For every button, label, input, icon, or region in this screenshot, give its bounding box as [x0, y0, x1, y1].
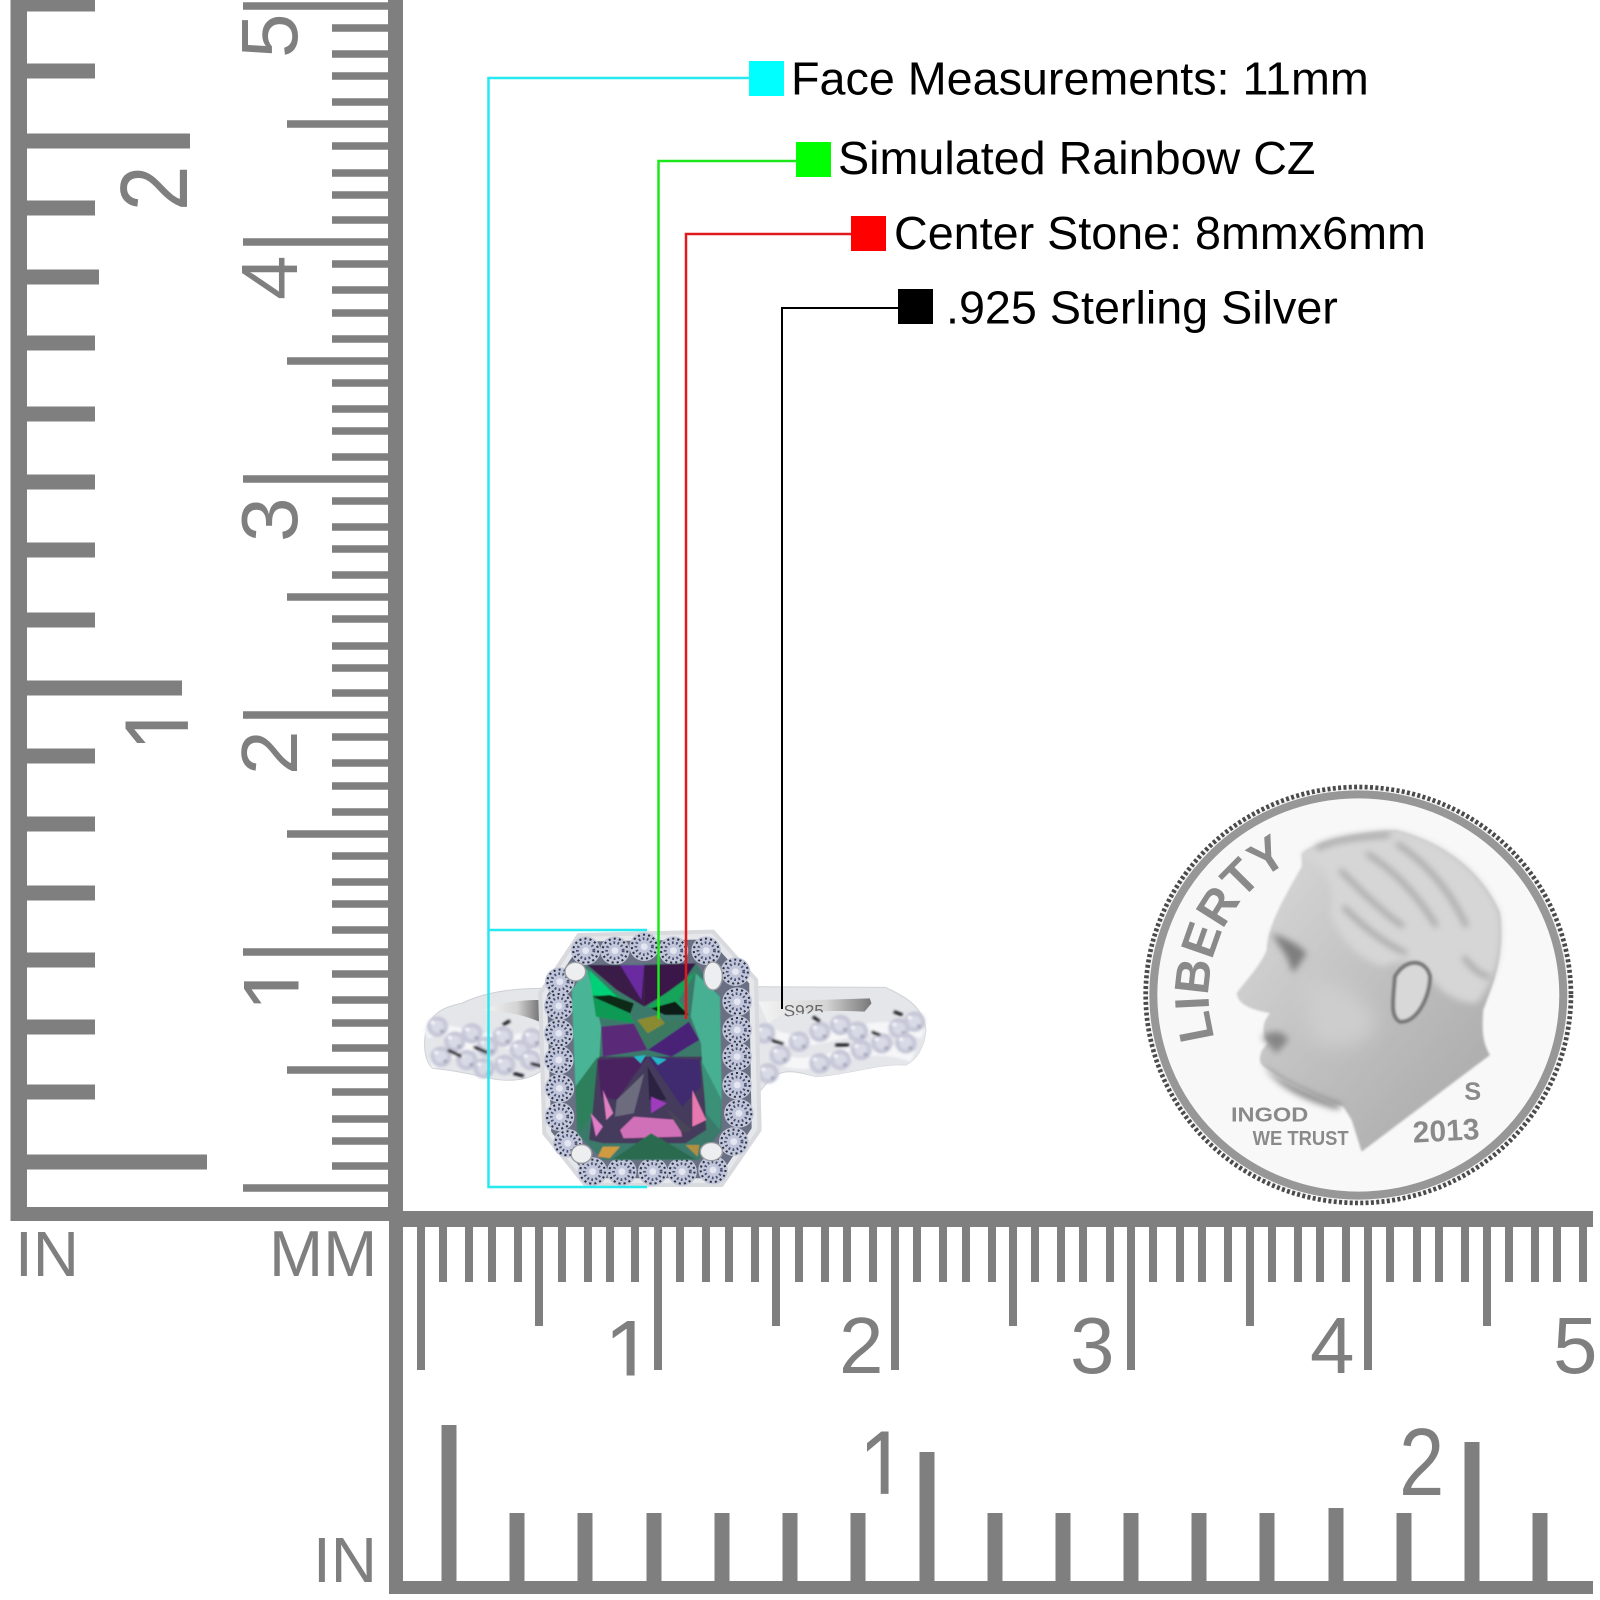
- millimetre numbers: bottom ruler: 3: [1070, 1301, 1114, 1390]
- coin rim: [1153, 794, 1563, 1196]
- legend text: stone type: Simulated Rainbow CZ: [838, 132, 1315, 184]
- coin inscription: IN GOD: INGOD: [1231, 1104, 1308, 1127]
- halo stones: [544, 932, 754, 1186]
- portrait: hair: [1302, 831, 1501, 1003]
- inch numbers: left ruler: [120, 170, 188, 743]
- millimetre numbers: bottom ruler: 1: [604, 1303, 654, 1403]
- portrait: head and neck: [1237, 830, 1501, 1152]
- pavé stones: left band: [425, 1016, 543, 1079]
- millimetre numbers: left ruler: [241, 16, 298, 1004]
- portrait: brow and eye shadow: [1272, 933, 1307, 973]
- unit label: MM: MM: [269, 1217, 377, 1290]
- millimetre numbers: bottom ruler: 4: [1310, 1301, 1354, 1390]
- ring band: left shank: [425, 988, 543, 1080]
- legend text: metal: .925 Sterling Silver: [946, 282, 1338, 334]
- left vertical ruler: [10, 0, 403, 1221]
- ring band: right shank: [756, 987, 926, 1090]
- pavé stones: right band: [754, 1011, 925, 1084]
- portrait: hair strands: [1317, 835, 1490, 977]
- bottom horizontal ruler: [389, 1211, 1598, 1594]
- portrait: cheek highlight: [1303, 982, 1377, 1047]
- prong settings: [565, 962, 722, 1163]
- unit label: IN bottom: IN: [313, 1524, 377, 1596]
- ring band: right cover over stamp: [768, 1011, 926, 1077]
- unit label: IN top: IN: [15, 1218, 79, 1290]
- halo setting outline: [540, 932, 760, 1185]
- coin reeded edge: [1146, 787, 1571, 1203]
- legend swatch: green: [796, 142, 831, 177]
- legend text: face measurements: Face Measurements: 11mm: [791, 52, 1369, 104]
- legend swatch: black: [898, 289, 933, 324]
- ruler frame: bottom ruler: [389, 1211, 1593, 1594]
- callout line: red: [686, 234, 851, 1019]
- millimetre numbers: bottom ruler: [612, 1317, 1594, 1376]
- legend swatch: red: [851, 216, 886, 251]
- ring band: left inner shadow: [484, 1000, 539, 1022]
- coin inscription: LIBERTY: LIBERTY: [1174, 834, 1279, 1042]
- portrait: ear: [1393, 963, 1430, 1022]
- dime coin for scale: [1143, 784, 1574, 1206]
- inch numbers: bottom ruler: 1: [858, 1410, 908, 1526]
- inch numbers: bottom ruler: 2: [1399, 1408, 1444, 1515]
- hallmark stamp: S925: [784, 1002, 824, 1021]
- halo stone bed: [547, 939, 752, 1178]
- callout line: green: [658, 161, 796, 1019]
- millimetre numbers: left ruler: 4: [225, 256, 314, 300]
- inch tick marks: left ruler: [27, 4, 207, 1162]
- millimetre numbers: left ruler: 5: [225, 14, 314, 58]
- millimetre numbers: left ruler: 3: [225, 498, 314, 542]
- ruler frame: left ruler: [10, 0, 403, 1221]
- inch tick marks: bottom ruler: [449, 1425, 1540, 1581]
- coin mint mark: S: [1464, 1078, 1481, 1106]
- inch numbers: left ruler: 2: [100, 166, 207, 211]
- ring illustration: [425, 932, 926, 1186]
- millimetre numbers: bottom ruler: 5: [1553, 1301, 1598, 1390]
- coin year: 2013: [1412, 1113, 1480, 1150]
- inch numbers: bottom ruler: [867, 1428, 1440, 1495]
- legend swatch: cyan: [749, 61, 784, 96]
- ring band: right inner shadow: [759, 998, 871, 1023]
- callout line and face bracket: cyan: [488, 78, 749, 1187]
- legend text: centre stone: Center Stone: 8mmx6mm: [894, 207, 1426, 259]
- coin inscription: WE TRUST: WE TRUST: [1253, 1127, 1349, 1150]
- millimetre tick marks: left ruler: [243, 6, 388, 1188]
- inch numbers: left ruler: 1: [104, 702, 220, 752]
- millimetre numbers: left ruler: 2: [225, 730, 314, 775]
- callout line: black: [782, 308, 898, 1009]
- millimetre numbers: left ruler: 1: [226, 962, 326, 1012]
- millimetre tick marks: bottom ruler: [421, 1227, 1583, 1370]
- millimetre numbers: bottom ruler: 2: [839, 1301, 884, 1390]
- centre stone: [572, 963, 722, 1160]
- portrait: mouth and jaw shadow: [1262, 1032, 1343, 1109]
